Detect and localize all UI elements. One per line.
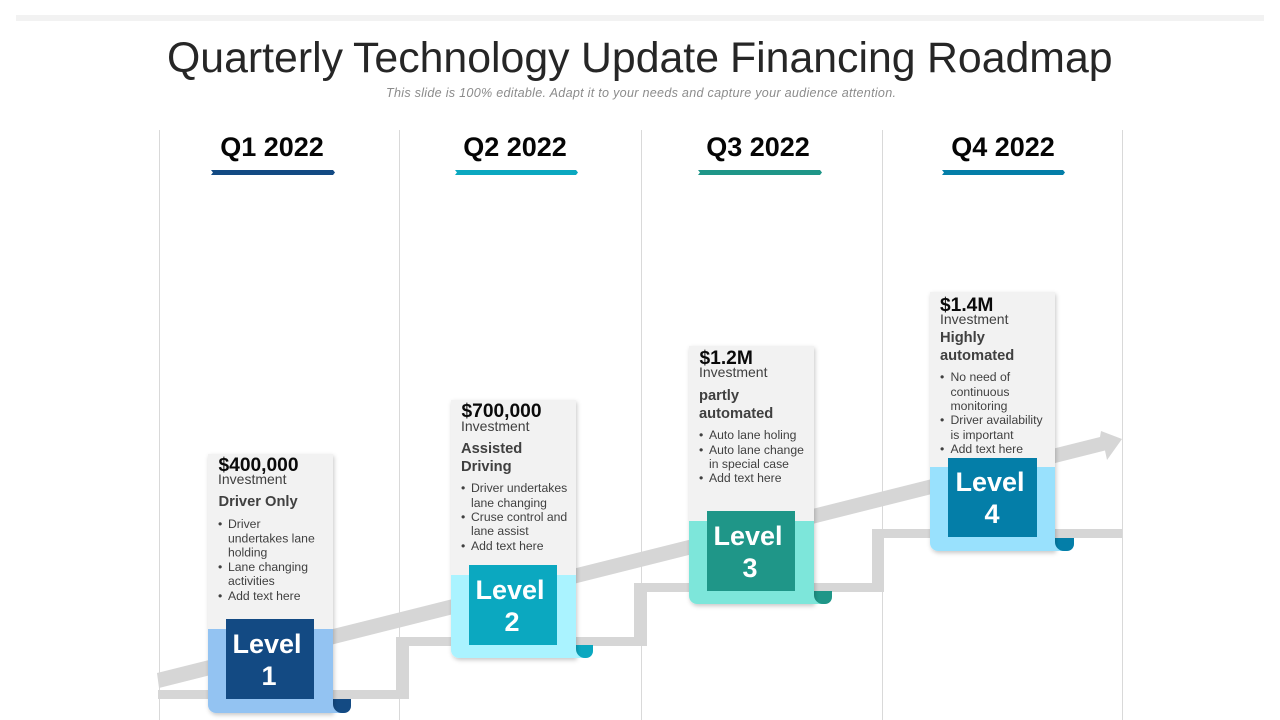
level 1 text: undertakes lane <box>228 532 315 546</box>
arrow: rising trend <box>157 431 1122 688</box>
level 4 text: Investment <box>940 311 1009 327</box>
level 4 text: No need of <box>950 370 1011 384</box>
level 4 text: Add text here <box>950 442 1023 456</box>
level 3 text: Auto lane change <box>709 443 804 457</box>
title: Update <box>581 34 719 82</box>
level 2 text: $700,000 <box>462 401 542 422</box>
subtitle: This slide is 100% editable. Adapt it to your needs and capture your audience attention. <box>386 86 896 100</box>
level 1 text: Driver Only <box>218 494 299 510</box>
level 4 text: monitoring <box>950 399 1007 413</box>
level 4 text <box>940 295 1044 456</box>
level 1 text: holding <box>228 546 267 560</box>
level 1 text: Investment <box>218 471 287 487</box>
level 3 text: Investment <box>699 364 768 380</box>
level 3 text: partly <box>699 388 740 404</box>
level 1 text: • <box>218 589 222 603</box>
level 1 text: activities <box>228 574 275 588</box>
level 3 text: • <box>699 471 703 485</box>
panel: level 4 <box>930 292 1074 551</box>
level 2 text: Investment <box>461 418 530 434</box>
header: Q3 2022: Q3 2022 <box>706 132 810 162</box>
level 4 text: • <box>940 370 944 384</box>
title: Roadmap <box>927 34 1113 82</box>
level 2 text: Assisted <box>461 441 522 457</box>
level 4 badge <box>948 458 1037 537</box>
header: Q2 2022 <box>455 132 578 175</box>
level 3 badge <box>707 511 795 591</box>
level 4 text: • <box>940 413 944 427</box>
level 2 text: Cruse control and <box>471 510 567 524</box>
level 4 text: Driver availability <box>950 413 1044 427</box>
level 4 text: automated <box>940 348 1014 364</box>
header: Q4 2022: Q4 2022 <box>951 132 1055 162</box>
panel: level 1 <box>208 454 351 713</box>
level 3 text: Auto lane holing <box>709 428 796 442</box>
level 2 badge: 2 <box>504 607 520 637</box>
level 3 text: in special case <box>709 457 789 471</box>
level 2 text: lane assist <box>471 524 529 538</box>
level 3 text: Add text here <box>709 471 782 485</box>
level 1 text: • <box>218 517 222 531</box>
level 3 text: automated <box>699 406 773 422</box>
level 3 badge: 3 <box>742 553 758 583</box>
level 2 text: lane changing <box>471 496 547 510</box>
header: Q3 2022 <box>698 132 822 175</box>
level 4 text: continuous <box>950 385 1009 399</box>
title: Quarterly <box>167 34 344 82</box>
level 2 text: Driver undertakes <box>471 481 567 495</box>
level 2 badge: Level <box>475 575 545 605</box>
level 1 text: $400,000 <box>218 455 299 476</box>
level 2 text: • <box>461 539 465 553</box>
title: Financing <box>730 34 916 82</box>
level 1 text: • <box>218 560 222 574</box>
level 2 text: Add text here <box>471 539 544 553</box>
level 3 text <box>699 348 804 485</box>
level 2 text <box>461 401 567 553</box>
header: Q1 2022: Q1 2022 <box>220 132 324 162</box>
panel: level 2 <box>451 400 593 658</box>
header: Q1 2022 <box>211 132 335 175</box>
level 4 text: • <box>940 442 944 456</box>
level 4 text: Highly <box>940 330 986 346</box>
level 4 text: is important <box>950 428 1014 442</box>
level 3 badge: Level <box>713 521 783 551</box>
level 3 text: • <box>699 443 703 457</box>
level 3 text: $1.2M <box>700 348 753 369</box>
level 2 text: Driving <box>461 459 512 475</box>
level 2 text: • <box>461 481 465 495</box>
level 3 text: • <box>699 428 703 442</box>
header: Q4 2022 <box>942 132 1065 175</box>
level 4 badge: 4 <box>984 499 1000 529</box>
level 2 badge <box>469 565 557 645</box>
header: Q2 2022: Q2 2022 <box>463 132 567 162</box>
level 1 text: Driver <box>228 517 260 531</box>
stair-step line <box>158 529 1122 699</box>
level 1 text <box>218 455 315 603</box>
level 1 badge: 1 <box>261 661 277 691</box>
level 1 text: Lane changing <box>228 560 308 574</box>
level 4 badge: Level <box>955 467 1025 497</box>
level 1 badge: Level <box>232 629 302 659</box>
level 2 text: • <box>461 510 465 524</box>
title: Technology <box>353 34 570 82</box>
panel: level 3 <box>689 346 832 604</box>
level 1 badge <box>226 619 314 699</box>
level 4 text: $1.4M <box>940 295 993 316</box>
level 1 text: Add text here <box>228 589 301 603</box>
